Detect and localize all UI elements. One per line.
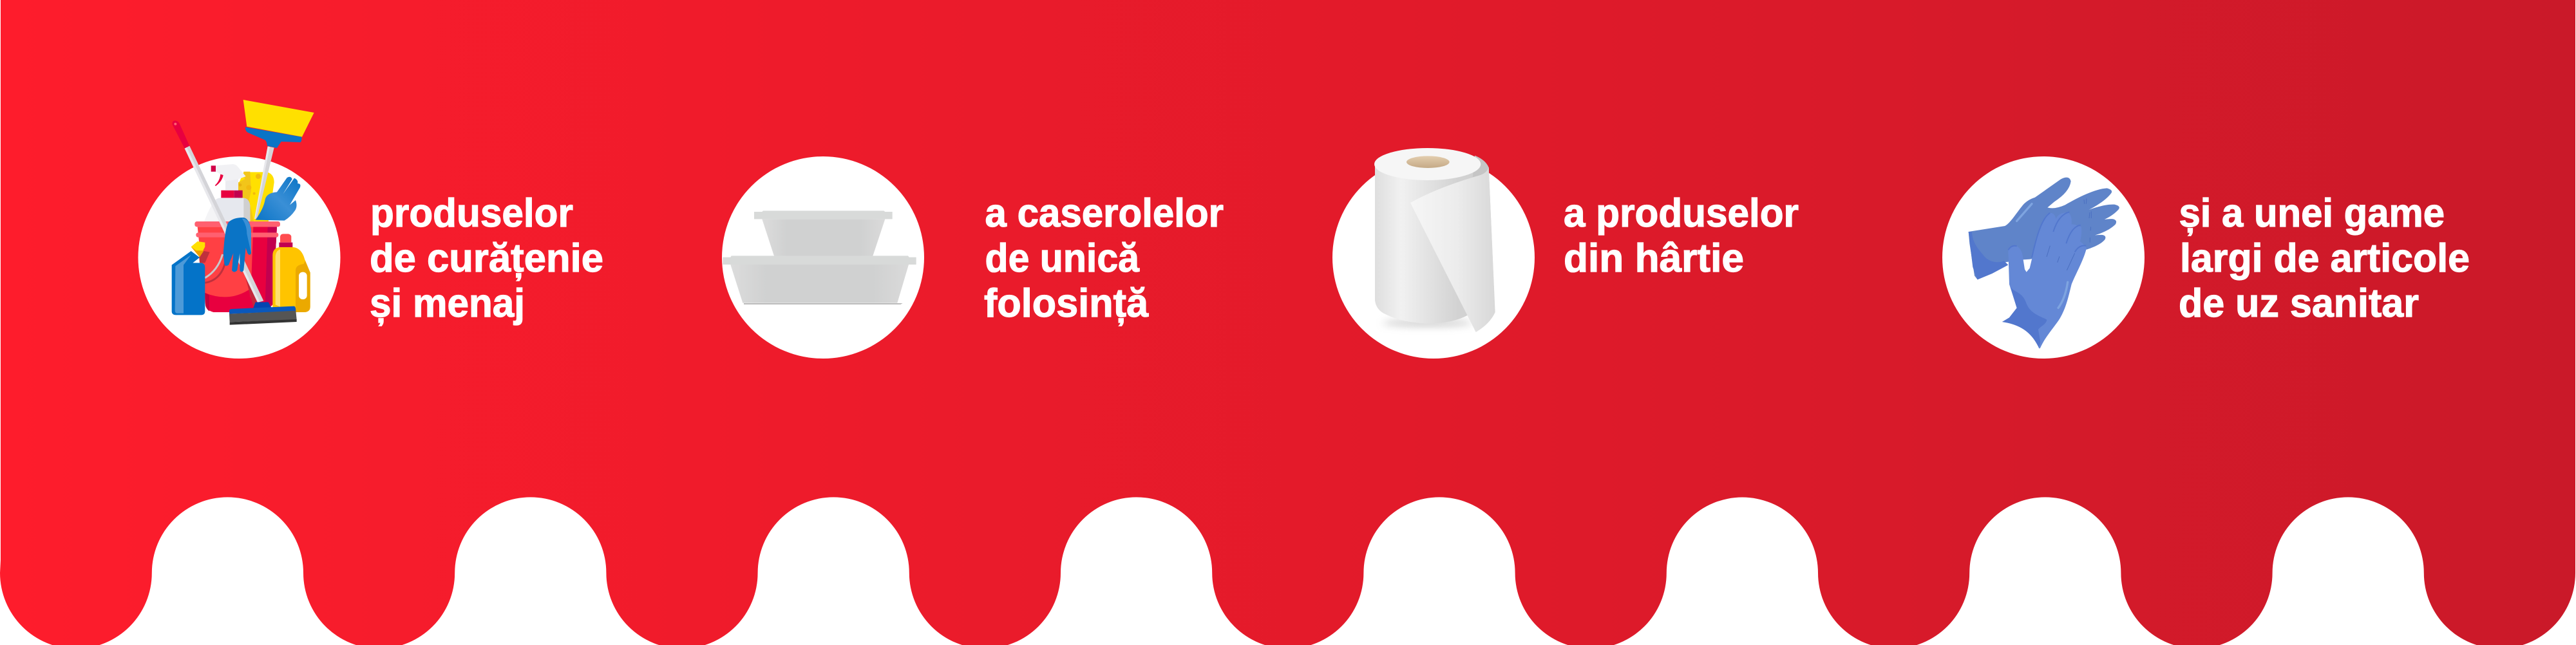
yellow bottle	[272, 234, 310, 312]
sponge	[238, 172, 274, 230]
back glove	[1969, 178, 2119, 279]
loose sheet	[1410, 167, 1495, 332]
panel: sanitary articles	[1942, 156, 2470, 359]
panel: cleaning products	[138, 100, 603, 359]
front glove	[2002, 212, 2087, 348]
spray bottle	[203, 164, 250, 225]
large container	[723, 256, 916, 304]
icon: cleaning supplies	[172, 100, 314, 325]
label: cleaning products: și menaj	[370, 281, 525, 326]
broom	[243, 100, 314, 219]
glove gap	[2023, 259, 2032, 272]
cardboard core	[1406, 156, 1450, 168]
finger outlines	[2008, 212, 2086, 257]
label: paper products: din hârtie	[1564, 236, 1744, 281]
icon circle: sanitary	[1942, 156, 2145, 359]
label: disposable containers: folosință	[984, 281, 1149, 326]
back glove cuff	[1969, 232, 2008, 279]
bucket	[194, 221, 280, 312]
label: disposable containers: de unică	[985, 236, 1139, 281]
label: cleaning products: produselor	[370, 191, 573, 236]
hanging glove	[223, 218, 251, 272]
label: paper products	[1564, 191, 1799, 281]
squeegee	[229, 302, 297, 325]
label: disposable containers	[984, 191, 1224, 326]
label: cleaning products	[370, 191, 603, 326]
label: sanitary articles: largi de articole	[2180, 236, 2470, 281]
roll top	[1374, 148, 1481, 180]
glove highlights	[2017, 204, 2068, 308]
label: disposable containers: a caserolelor	[985, 191, 1224, 236]
raised glove	[256, 177, 300, 221]
panel: paper products	[1332, 148, 1799, 359]
icon: blue gloves	[1969, 178, 2119, 348]
icon circle: containers	[722, 156, 924, 359]
back of sheet	[1473, 156, 1489, 178]
icon: stacked containers	[723, 210, 916, 304]
label: sanitary articles: de uz sanitar	[2179, 281, 2419, 326]
icon: paper roll	[1374, 148, 1495, 332]
roll body	[1375, 164, 1494, 324]
front glove cuff shading	[2002, 286, 2047, 348]
seam details	[2047, 198, 2091, 270]
icon circle: paper	[1332, 156, 1535, 359]
label: cleaning products: de curățenie	[370, 236, 603, 281]
label: sanitary articles: și a unei game	[2179, 191, 2445, 236]
label: sanitary articles	[2179, 191, 2470, 326]
label: paper products: a produselor	[1564, 191, 1799, 236]
blue bottle	[172, 241, 210, 315]
small container	[754, 210, 893, 258]
icon circle: cleaning	[138, 156, 340, 359]
roll shadow	[1383, 319, 1473, 326]
mop	[173, 120, 263, 303]
panel: disposable containers	[722, 156, 1224, 359]
